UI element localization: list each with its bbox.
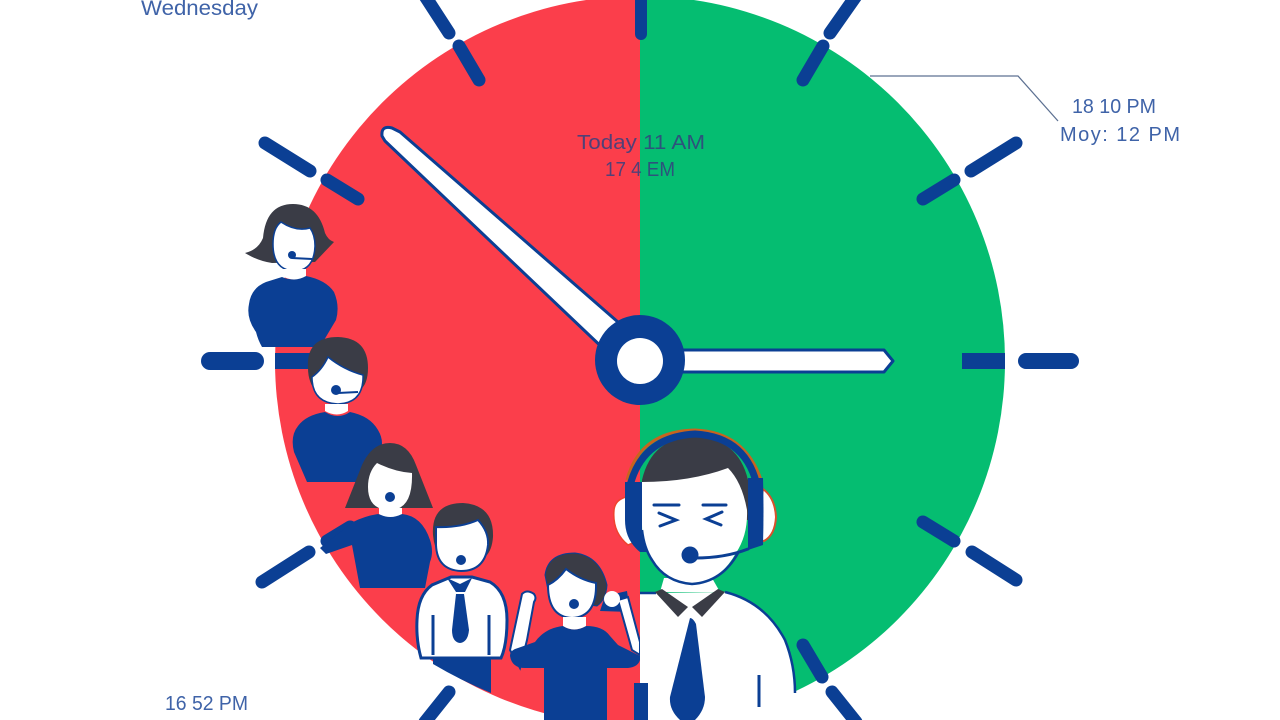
minute hand: [382, 127, 650, 372]
front tick marks over operator: [641, 645, 822, 720]
agent 1: woman with headset: [245, 204, 338, 347]
clock face: green half: [640, 0, 1005, 720]
callout text: time one: 18 10 PM: [1072, 96, 1156, 118]
agent 2: man with headset: [293, 337, 382, 482]
agent 3: woman speaking: [320, 443, 433, 588]
hour hand: [660, 350, 893, 372]
clock centre label line two: 17 4 EM: [605, 159, 675, 181]
agent 4: man in shirt and tie: [417, 503, 507, 693]
hour tick marks: [210, 0, 1071, 720]
agent 5: caller with phone: [510, 553, 640, 720]
callout leader line: [870, 76, 1058, 121]
callout text: time two: Moy: 12 PM: [1060, 124, 1180, 146]
bottom time label: 16 52 PM: [165, 693, 248, 715]
clock face: red half: [275, 0, 640, 720]
left tick inner: [275, 353, 335, 369]
agent 6: main operator with headset: [614, 430, 795, 720]
clock centre label line one: Today 11 AM: [577, 132, 705, 154]
clock hub: [595, 315, 685, 405]
